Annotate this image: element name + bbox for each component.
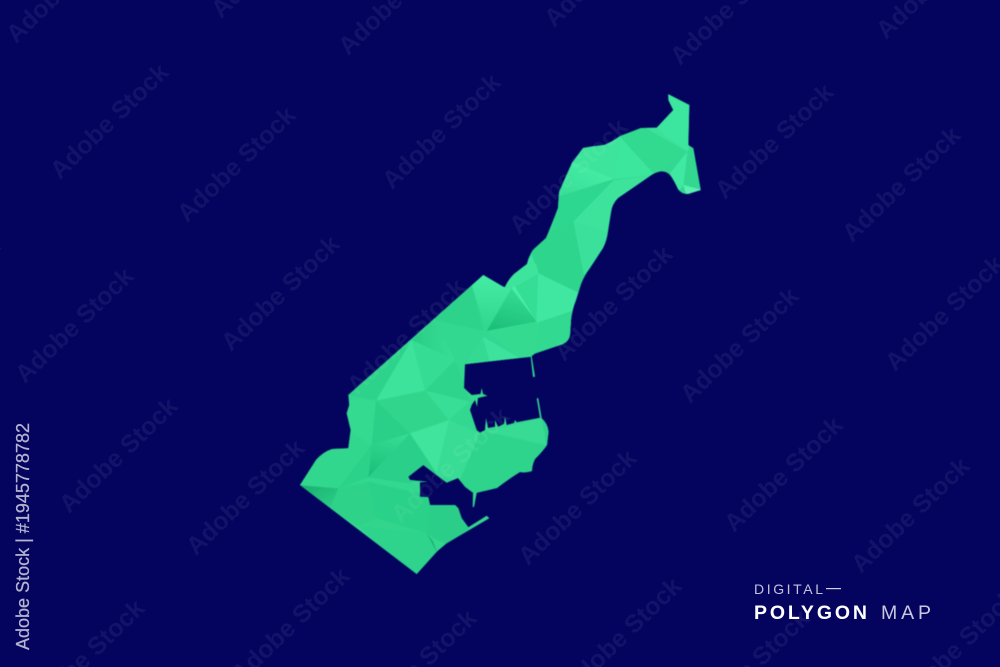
watermark: Adobe Stock repeated: Adobe Stock (719, 411, 848, 537)
watermark: Adobe Stock repeated: Adobe Stock (377, 68, 506, 194)
watermark: Adobe Stock repeated: Adobe Stock (549, 240, 678, 366)
watermark: Adobe Stock repeated: Adobe Stock (54, 392, 183, 518)
watermark: Adobe Stock repeated: Adobe Stock (181, 434, 310, 560)
vertical stock id text: Adobe Stock | #1945778782 (13, 423, 33, 650)
watermark: Adobe Stock repeated: Adobe Stock (386, 402, 515, 528)
watermark: Adobe Stock repeated: Adobe Stock (172, 101, 301, 227)
watermark: Adobe Stock repeated: Adobe Stock (216, 230, 345, 356)
polygon map of Monaco (290, 85, 710, 580)
watermark: Adobe Stock repeated: Adobe Stock (710, 78, 839, 204)
watermark: Adobe Stock repeated: Adobe Stock (837, 121, 966, 247)
watermark: Adobe Stock repeated: Adobe Stock (846, 452, 975, 578)
caption: digital polygon map (754, 581, 931, 624)
upper mesh (503, 92, 703, 357)
watermark: Adobe Stock repeated: Adobe Stock (45, 58, 174, 184)
caption word: polygon: POLYGON (754, 602, 867, 624)
watermark: Adobe Stock repeated: Adobe Stock (10, 262, 139, 388)
watermark: Adobe Stock repeated: Adobe Stock (675, 282, 804, 408)
caption dash (826, 588, 841, 589)
lower mesh (297, 263, 573, 577)
caption word: map: MAP (881, 602, 931, 624)
watermark: Adobe Stock repeated: Adobe Stock (342, 273, 471, 399)
caption line: digital: DIGITAL (754, 581, 823, 597)
watermark: Adobe Stock repeated: Adobe Stock (504, 113, 633, 239)
watermark: Adobe Stock repeated: Adobe Stock (513, 444, 642, 570)
